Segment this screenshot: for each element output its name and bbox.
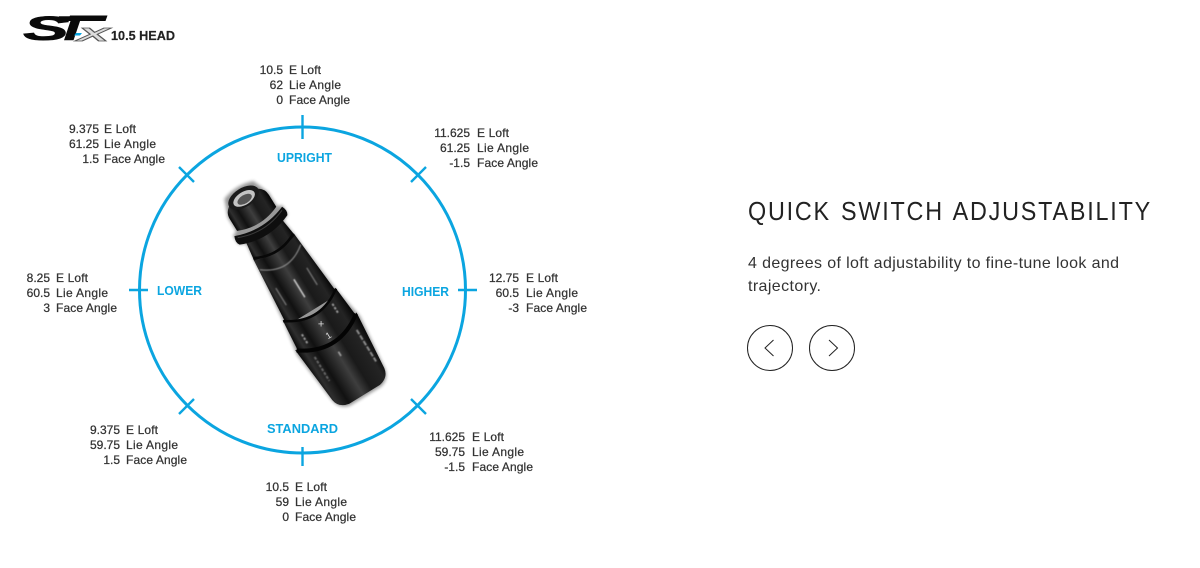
collar edge lines bbox=[283, 289, 342, 330]
data: upper left position: 1.5 bbox=[82, 152, 99, 166]
logo wordmark S: S bbox=[23, 10, 70, 48]
data: top position: E Loft bbox=[289, 63, 322, 77]
data: right position: Lie Angle bbox=[526, 286, 578, 300]
label: standard: STANDARD bbox=[267, 422, 338, 436]
logo wordmark T: T bbox=[54, 10, 96, 48]
data: lower left position bbox=[90, 423, 187, 467]
data: top position: 62 bbox=[270, 78, 283, 92]
data: upper right position: Lie Angle bbox=[477, 141, 529, 155]
data: upper right position: 11.625 bbox=[434, 126, 470, 140]
data: upper right position: E Loft bbox=[477, 126, 510, 140]
collar marking one: 1 bbox=[324, 330, 333, 341]
shoulder highlight line bbox=[260, 245, 306, 278]
data: left position: 8.25 bbox=[27, 271, 50, 285]
data: lower right position: Lie Angle bbox=[472, 445, 524, 459]
data: lower right position bbox=[429, 430, 533, 474]
data: upper right position: 61.25 bbox=[440, 141, 470, 155]
data: bottom position bbox=[266, 480, 356, 524]
logo wordmark x: X bbox=[74, 25, 112, 45]
data: upper left position: Lie Angle bbox=[104, 137, 156, 151]
data: top position: Lie Angle bbox=[289, 78, 341, 92]
data: bottom position: 0 bbox=[282, 510, 289, 524]
data: right position: -3 bbox=[508, 301, 519, 315]
data: upper left position: 61.25 bbox=[69, 137, 99, 151]
logo: STx 10.5 head bbox=[23, 10, 175, 48]
data: lower right position: -1.5 bbox=[444, 460, 465, 474]
data: top position: Face Angle bbox=[289, 93, 350, 107]
sleeve bbox=[295, 312, 395, 413]
data: right position: E Loft bbox=[526, 271, 559, 285]
data: upper left position: E Loft bbox=[104, 122, 137, 136]
data: lower left position: Face Angle bbox=[126, 453, 187, 467]
data: right position: Face Angle bbox=[526, 301, 587, 315]
icon: next arrow button bbox=[810, 326, 854, 370]
data: left position: 60.5 bbox=[27, 286, 50, 300]
label: upright: UPRIGHT bbox=[277, 151, 332, 165]
adapter photo illustration bbox=[206, 168, 397, 415]
data: lower right position: 59.75 bbox=[435, 445, 465, 459]
data: upper left position: 9.375 bbox=[69, 122, 99, 136]
data: upper left position bbox=[69, 122, 165, 166]
data: bottom position: 10.5 bbox=[266, 480, 289, 494]
data: top position bbox=[260, 63, 350, 107]
head bbox=[224, 186, 279, 235]
data: right position bbox=[489, 271, 587, 315]
data: bottom position: Lie Angle bbox=[295, 495, 347, 509]
label: higher: HIGHER bbox=[402, 285, 449, 299]
collar marking plus: + bbox=[318, 319, 324, 331]
data: lower right position: Face Angle bbox=[472, 460, 533, 474]
description text bbox=[748, 255, 1119, 295]
data: bottom position: E Loft bbox=[295, 480, 328, 494]
data: left position: E Loft bbox=[56, 271, 89, 285]
data: right position: 12.75 bbox=[489, 271, 519, 285]
thread opening bbox=[224, 181, 263, 215]
description text: trajectory. bbox=[748, 278, 821, 295]
diagram: adjustment dial bbox=[129, 115, 477, 466]
ring bbox=[233, 206, 292, 250]
data: left position: Lie Angle bbox=[56, 286, 108, 300]
icon: previous arrow button bbox=[748, 326, 792, 370]
data: top position: 0 bbox=[276, 93, 283, 107]
data: lower left position: E Loft bbox=[126, 423, 159, 437]
description text: 4 degrees of loft adjustability to fine-tune look and bbox=[748, 255, 1119, 272]
data: lower right position: E Loft bbox=[472, 430, 505, 444]
data: lower right position: 11.625 bbox=[429, 430, 465, 444]
data: lower left position: Lie Angle bbox=[126, 438, 178, 452]
data: left position: Face Angle bbox=[56, 301, 117, 315]
neck bbox=[243, 216, 298, 265]
data: lower left position: 59.75 bbox=[90, 438, 120, 452]
heading: QUICK SWITCH ADJUSTABILITY bbox=[748, 196, 1152, 226]
data: lower left position: 1.5 bbox=[103, 453, 120, 467]
data: upper right position bbox=[434, 126, 538, 170]
data: lower left position: 9.375 bbox=[90, 423, 120, 437]
dial ring bbox=[140, 127, 466, 453]
dial tick marks bbox=[129, 115, 477, 466]
data: upper left position: Face Angle bbox=[104, 152, 165, 166]
data: left position: 3 bbox=[43, 301, 50, 315]
logo head label: 10.5 HEAD bbox=[111, 29, 175, 43]
data: left position bbox=[27, 271, 117, 315]
collar bbox=[280, 286, 362, 361]
data: right position: 60.5 bbox=[496, 286, 519, 300]
data: top position: 10.5 bbox=[260, 63, 283, 77]
data: upper right position: Face Angle bbox=[477, 156, 538, 170]
data: bottom position: Face Angle bbox=[295, 510, 356, 524]
data: bottom position: 59 bbox=[276, 495, 289, 509]
body bbox=[248, 230, 338, 326]
data: upper right position: -1.5 bbox=[449, 156, 470, 170]
engraved marks bbox=[273, 263, 376, 388]
label: lower: LOWER bbox=[157, 284, 202, 298]
